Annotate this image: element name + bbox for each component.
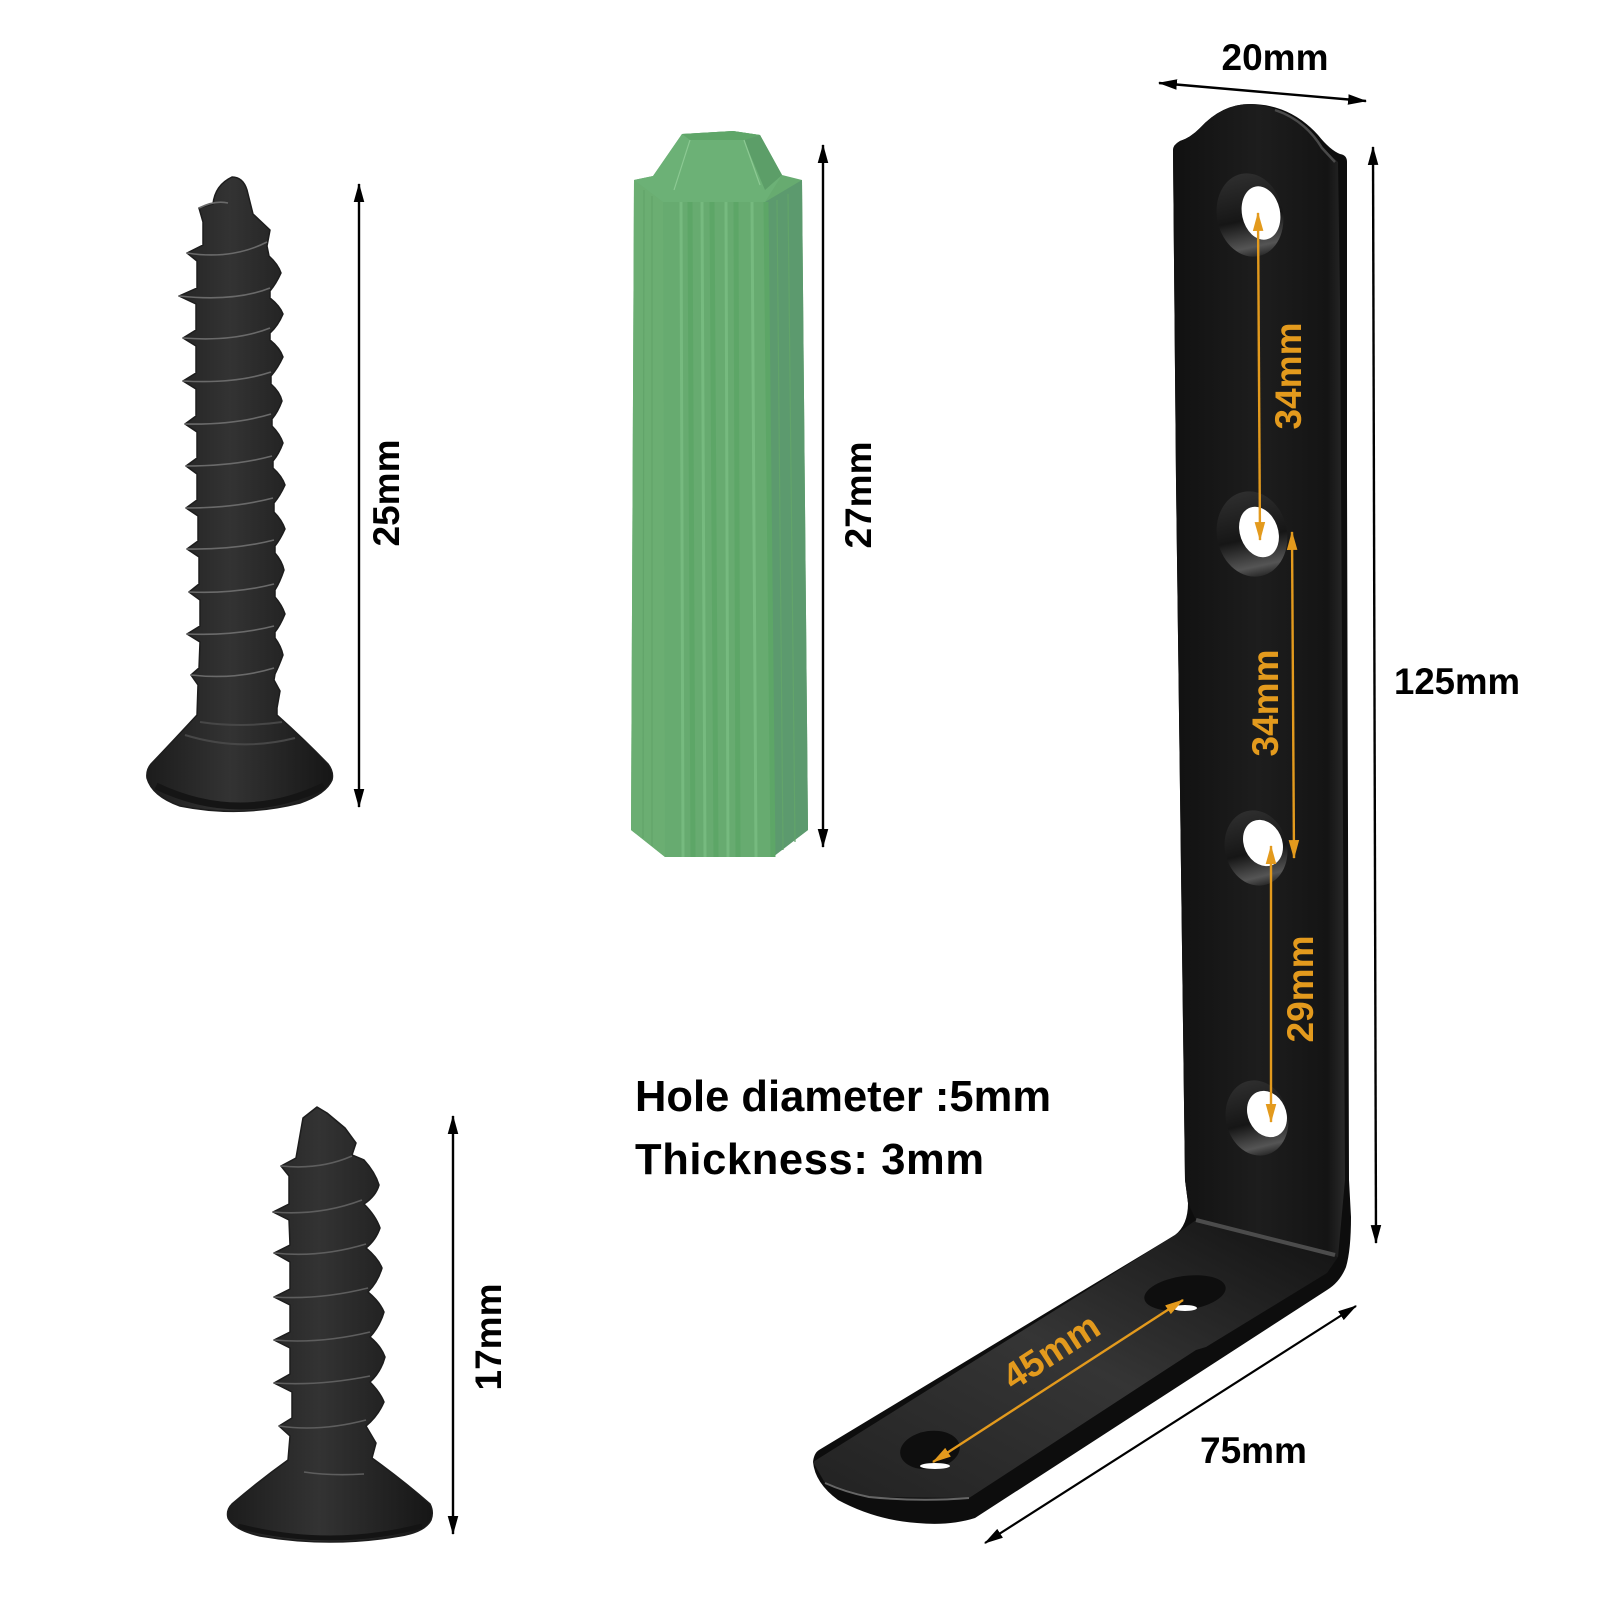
label: 20mm: 20mm: [1222, 37, 1328, 78]
label: 27mm: 27mm: [838, 442, 879, 548]
plug height arrow: [822, 145, 824, 847]
long screw: [147, 177, 332, 811]
orange label: upper 34mm: 34mm: [1268, 323, 1309, 429]
orange spacing arrow: upper 34mm: [1258, 213, 1260, 540]
label: 75mm: 75mm: [1200, 1430, 1307, 1471]
black L bracket: [813, 104, 1351, 1524]
mounting hole 2: [1209, 485, 1295, 583]
mounting hole 3: [1217, 804, 1295, 892]
bracket arm length arrow: [985, 1306, 1356, 1543]
orange spacing arrow: middle 34mm: [1292, 532, 1294, 858]
thickness specification: Thickness: 3mm: [635, 1136, 984, 1184]
mounting hole 4: [1218, 1074, 1296, 1162]
label: 17mm: 17mm: [468, 1284, 509, 1390]
bracket height arrow: [1373, 147, 1376, 1243]
short screw height arrow: [452, 1116, 454, 1534]
green wall plug: [631, 131, 808, 857]
mounting hole 5: [1142, 1270, 1228, 1316]
mounting hole 6: [898, 1427, 962, 1473]
hole diameter specification: Hole diameter :5mm: [635, 1073, 1051, 1121]
label: 125mm: 125mm: [1394, 661, 1520, 702]
orange label: middle 34mm: 34mm: [1245, 650, 1286, 756]
bracket width arrow: [1159, 83, 1366, 101]
mounting hole 1: [1209, 167, 1291, 263]
long screw height arrow: [358, 184, 360, 807]
short screw: [228, 1107, 432, 1542]
orange label: 29mm: 29mm: [1280, 936, 1321, 1042]
label: 25mm: 25mm: [366, 440, 407, 546]
orange spacing arrow: 29mm: [1270, 846, 1272, 1122]
orange spacing arrow: 45mm: [933, 1300, 1183, 1462]
orange label: 45mm: 45mm: [995, 1305, 1107, 1398]
